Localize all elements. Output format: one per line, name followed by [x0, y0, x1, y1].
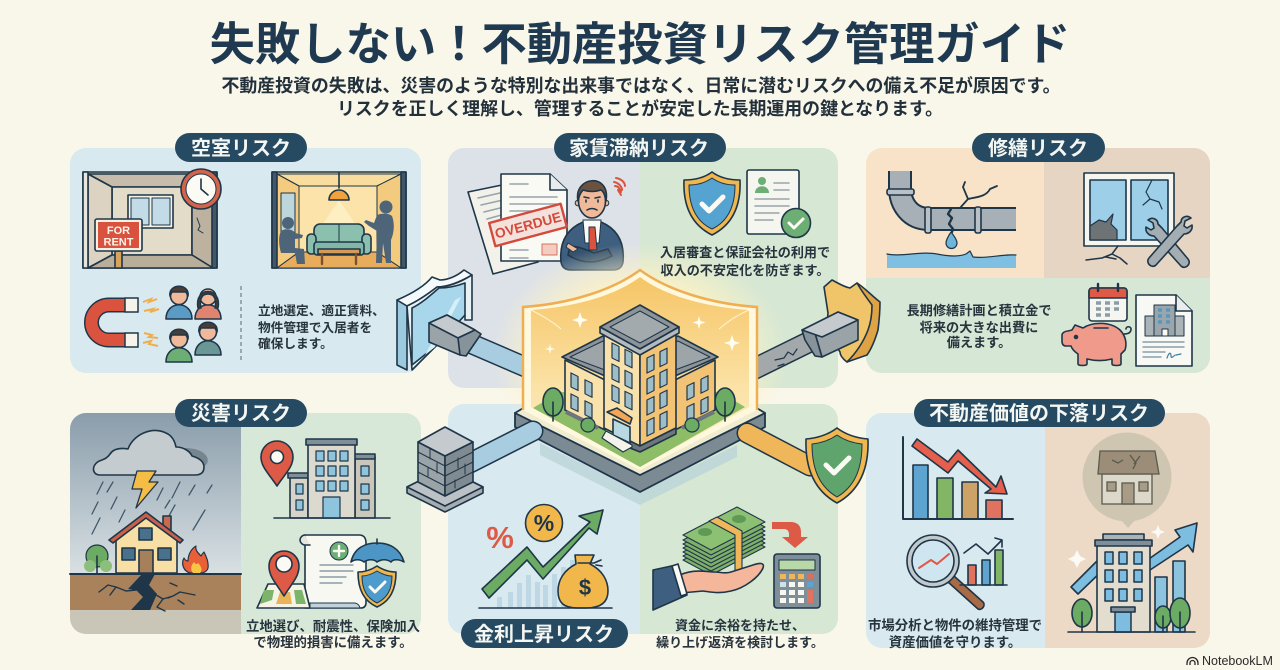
text: vacancy countermeasure: 立地選定、適正賃料、: [258, 303, 385, 318]
text: arrears countermeasure: 収入の不安定化を防ぎます。: [661, 262, 829, 278]
icon: cracked leaking pipe: [887, 171, 1016, 268]
icon: cash stack in hand: [653, 507, 765, 610]
heading: interest rate risk: 金利上昇リスク: [474, 623, 614, 646]
heading: interest rate risk: [461, 619, 628, 648]
text: arrears countermeasure: 入居審査と保証会社の利用で: [660, 244, 830, 260]
panel: rent arrears risk: [448, 148, 838, 388]
text: vacancy countermeasure: [258, 303, 385, 351]
icon: repayment arrow and calculator: [772, 522, 820, 608]
arrow: pipe to repair risk: [750, 312, 858, 371]
icon: map, insurance policy and shield: [257, 535, 404, 608]
text: repair countermeasure: 備えます。: [947, 335, 1011, 350]
icon: house with fire and earthquake crack: [70, 512, 241, 611]
icon: overdue documents: OVERDUE: [493, 209, 563, 242]
subtitle text block: [221, 75, 1061, 119]
icon: overdue documents: [468, 174, 567, 274]
panel: vacancy risk: [70, 148, 421, 373]
panel: interest rate risk: [448, 404, 838, 650]
heading: rent arrears risk: 家賃滞納リスク: [569, 137, 709, 160]
panel: asset value decline risk: [866, 413, 1210, 650]
text: repair countermeasure: 長期修繕計画と積立金で: [906, 302, 1052, 318]
text: asset value countermeasure: [868, 617, 1042, 650]
heading: disaster risk: 災害リスク: [191, 402, 291, 425]
icon: interest rate chart with money bag: [479, 504, 612, 608]
text: asset value countermeasure: 市場分析と物件の維持管理で: [868, 617, 1042, 633]
icon: storm, lightning and rain: [92, 431, 212, 534]
icon: interest rate chart with money bag: $: [579, 575, 591, 600]
icon: well-kept building with rising value: [1068, 523, 1197, 632]
icon: interest rate chart with money bag: %: [534, 510, 554, 536]
center hub: protective shield and platform: [515, 270, 765, 505]
arrow: pipe to asset value risk: [747, 433, 810, 466]
text: interest rate countermeasure: [656, 618, 824, 650]
text: disaster countermeasure: [246, 618, 421, 650]
heading: vacancy risk: [175, 133, 307, 162]
text: interest rate countermeasure: 繰り上げ返済を検討します。: [656, 635, 824, 650]
text: interest rate countermeasure: 資金に余裕を持たせ、: [675, 618, 805, 633]
text: disaster countermeasure: で物理的損害に備えます。: [253, 634, 413, 650]
icon: empty room with for-rent sign: [83, 169, 221, 268]
icon: interest rate chart with money bag: %: [486, 520, 514, 555]
heading: asset value decline risk: [914, 399, 1165, 427]
text: repair countermeasure: 将来の大きな出費に: [920, 319, 1038, 335]
panel: repair risk: [866, 148, 1210, 373]
icon: calendar, piggy bank and plan: [1062, 284, 1192, 366]
text: arrears countermeasure: [660, 244, 830, 278]
logo: NotebookLM watermark: NotebookLM: [1202, 654, 1273, 668]
icon: aged house thought bubble: [1082, 432, 1172, 528]
icon: glass wall connector: [397, 270, 472, 370]
text: vacancy countermeasure: 物件管理で入居者を: [258, 320, 372, 335]
title: 失敗しない！不動産投資リスク管理ガイド: [210, 19, 1070, 70]
icon: occupied living room: [272, 172, 406, 268]
icon: empty room with for-rent sign: RENT: [104, 236, 134, 248]
icon: broken window and wrenches: [1084, 173, 1192, 267]
subtitle text block: 不動産投資の失敗は、災害のような特別な出来事ではなく、日常に潜むリスクへの備え不足が原因です。: [221, 75, 1061, 96]
center hub: isometric apartment buildings: [543, 305, 735, 452]
panel: disaster risk: [70, 413, 421, 650]
text: vacancy countermeasure: 確保します。: [258, 336, 333, 351]
icon: gold shield connector: [824, 280, 880, 362]
text: repair countermeasure: [906, 302, 1052, 350]
icon: magnet attracting tenants: [92, 286, 221, 362]
center: glow behind hub: [492, 243, 788, 467]
heading: vacancy risk: 空室リスク: [191, 137, 291, 160]
text: disaster countermeasure: 立地選び、耐震性、保険加入: [246, 618, 421, 634]
heading: repair risk: [972, 133, 1105, 162]
icon: magnifier and market chart: [907, 535, 1007, 609]
icon: green shield connector: [806, 428, 868, 503]
heading: disaster risk: [175, 399, 307, 427]
heading: rent arrears risk: [554, 133, 726, 162]
arrow: pipe to vacancy risk: [429, 315, 530, 369]
icon: guarantee shield: [684, 172, 740, 235]
icon: empty room with for-rent sign: FOR: [107, 225, 130, 237]
text: asset value countermeasure: 資産価値を守ります。: [889, 634, 1021, 650]
heading: asset value decline risk: 不動産価値の下落リスク: [929, 402, 1149, 425]
icon: location pin and buildings: [261, 439, 390, 518]
icon: falling bar chart: [903, 437, 1013, 519]
icon: frowning landlord: [561, 178, 625, 270]
subtitle text block: リスクを正しく理解し、管理することが安定した長期運用の鍵となります。: [337, 98, 943, 119]
icon: tenant screening form: [747, 170, 810, 238]
icon: brick wall connector: [407, 427, 483, 512]
heading: repair risk: 修繕リスク: [988, 137, 1088, 160]
arrow: pipe to disaster risk: [470, 431, 533, 463]
